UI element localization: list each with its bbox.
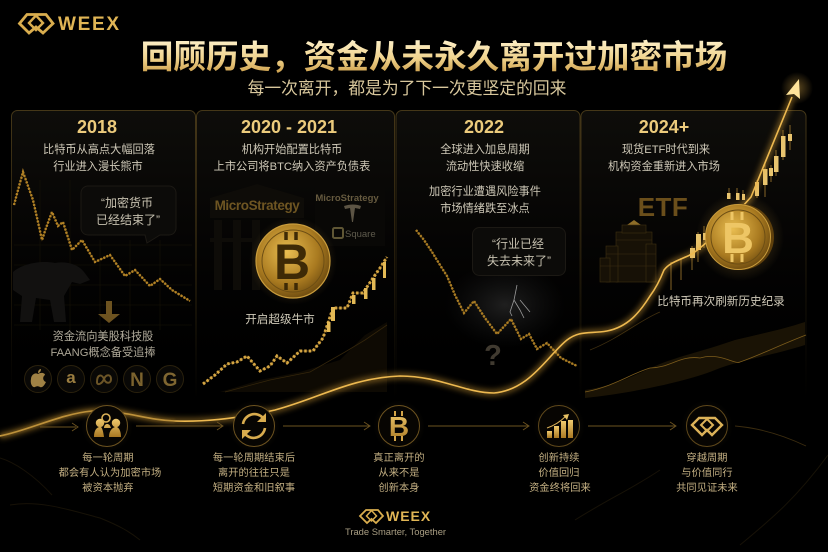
step 5 caption: 共同见证未来 [676, 482, 738, 494]
bitcoin coin: B [274, 234, 310, 290]
icon: netflix: N [130, 370, 144, 391]
capital flow text: 资金流向美股科技股 [53, 329, 153, 343]
footer brand [345, 508, 446, 537]
callout: industry has no future: 失去未来了” [487, 253, 551, 268]
step 3 caption [373, 451, 425, 494]
panel 2024 description: 机构资金重新进入市场 [608, 159, 720, 173]
icon: WEEX mark [20, 14, 53, 33]
panel 2020 description: 机构开始配置比特币 [242, 142, 342, 156]
bitcoin coin: B [722, 214, 754, 263]
bitcoin coin [696, 193, 784, 281]
panel 2018 heading: 2018 [77, 117, 117, 137]
panel 2024 heading: 2024+ [639, 117, 689, 137]
icon: square: Square [345, 229, 376, 240]
step 3 caption: 真正离开的 [373, 451, 425, 464]
institution logos [315, 186, 385, 246]
panel 2018 description: 比特币从高点大幅回落 [43, 142, 155, 156]
callout: crypto is over: 已经结束了” [96, 213, 160, 227]
step 3 caption: 从来不是 [378, 467, 420, 479]
step 1 caption [59, 451, 161, 494]
icon: down arrow [98, 301, 120, 323]
timeline step 3 [373, 400, 425, 494]
step 4 caption: 资金终将回来 [529, 481, 591, 494]
panel 2020 description [214, 142, 370, 173]
risk events text: 市场情绪跌至冰点 [440, 201, 530, 215]
step 3 caption: 创新本身 [378, 481, 420, 494]
bear market chart [14, 172, 192, 330]
super bull market label: 开启超级牛市 [245, 312, 315, 326]
step 2 caption: 短期资金和旧叙事 [213, 481, 295, 494]
panel 2020 heading: 2020 - 2021 [241, 117, 337, 137]
panel 2020 description: 上市公司将BTC纳入资产负债表 [214, 159, 370, 173]
icon: WEEX mark [681, 400, 733, 452]
subtitle: 每一次离开，都是为了下一次更坚定的回来 [248, 79, 567, 98]
icon: cycle arrows [228, 400, 280, 452]
callout: industry has no future: “行业已经 [492, 237, 544, 251]
brand logo top-left [20, 14, 121, 35]
terrain texture [0, 455, 828, 545]
capital flow text [50, 329, 156, 359]
step 1 caption: 每一轮周期 [82, 451, 134, 464]
callout: industry has no future [472, 228, 566, 276]
ETF sign: ETF [638, 192, 688, 222]
icon: growth bars [533, 400, 585, 452]
FAANG logo row [24, 366, 184, 392]
panel: 2020-2021 [196, 110, 394, 400]
icon: WEEX mark [360, 510, 383, 523]
institution logos: MicroStrategy [315, 193, 379, 204]
title: 回顾历史，资金从未永久离开过加密市场 [141, 38, 727, 75]
terrain area chart [585, 312, 806, 398]
timeline step 2 [213, 400, 295, 494]
bank building with MicroStrategy sign: MicroStrategy [215, 198, 300, 213]
callout: crypto is over [81, 186, 176, 243]
step 1 caption: 被资本抛弃 [82, 481, 134, 494]
panel 2022 heading: 2022 [464, 117, 504, 137]
callout: crypto is over: “加密货币 [101, 195, 153, 210]
step 5 caption: 穿越周期 [686, 451, 728, 464]
panel: 2022 [396, 110, 580, 400]
candlesticks [671, 125, 792, 290]
step 5 caption: 与价值同行 [681, 466, 733, 479]
brand logo top-left: WEEX [58, 14, 121, 35]
bull market chart [203, 257, 387, 392]
step 2 caption: 离开的往往只是 [218, 466, 290, 479]
timeline step 4 [529, 400, 591, 494]
record high label: 比特币再次刷新历史纪录 [657, 294, 785, 308]
bear market chart [416, 230, 577, 366]
panel 2022 description [440, 142, 530, 173]
arrowhead [786, 79, 800, 99]
timeline step 1 [59, 400, 161, 494]
icon: bear [13, 262, 90, 322]
step 2 caption [213, 451, 295, 494]
icon: skyscrapers [600, 220, 656, 282]
footer brand: WEEX [386, 508, 431, 524]
icon: tesla [344, 204, 361, 222]
panel 2022 description: 全球进入加息周期 [440, 142, 530, 156]
panel 2022 description: 流动性快速收缩 [446, 159, 524, 173]
storm cloud with lightning [445, 263, 565, 347]
step 2 caption: 每一轮周期结束后 [213, 451, 295, 464]
bank building with MicroStrategy sign [210, 184, 304, 290]
footer brand: Trade Smarter, Together [345, 526, 446, 537]
icon: bitcoin: B [389, 411, 409, 442]
timeline step 5 [676, 400, 738, 494]
icon: amazon: a [66, 368, 76, 387]
rising gold trend line with arrow [0, 72, 813, 436]
step 5 caption [676, 451, 738, 494]
panel 2018 description [43, 142, 155, 173]
bitcoin coin [249, 217, 337, 305]
step 1 caption: 都会有人认为加密市场 [59, 466, 161, 479]
timeline: connector arrows [40, 422, 806, 446]
risk events text: 加密行业遭遇风险事件 [429, 184, 541, 198]
icon: people [81, 400, 133, 452]
risk events text [429, 184, 541, 215]
panel: 2018 [12, 110, 196, 400]
icon: question mark: ? [484, 340, 502, 372]
icon: google: G [163, 370, 177, 391]
panel 2024 description [608, 142, 720, 173]
icon: apple [31, 369, 46, 387]
panel 2024 description: 现货ETF时代到来 [622, 142, 710, 156]
step 4 caption: 创新持续 [538, 451, 580, 464]
panel 2018 description: 行业进入漫长熊市 [53, 159, 143, 173]
capital flow text: FAANG概念备受追捧 [50, 345, 156, 359]
step 4 caption [529, 451, 591, 494]
panel: 2024+ [581, 110, 806, 400]
step 4 caption: 价值回归 [538, 466, 580, 479]
icon: meta [97, 375, 111, 384]
